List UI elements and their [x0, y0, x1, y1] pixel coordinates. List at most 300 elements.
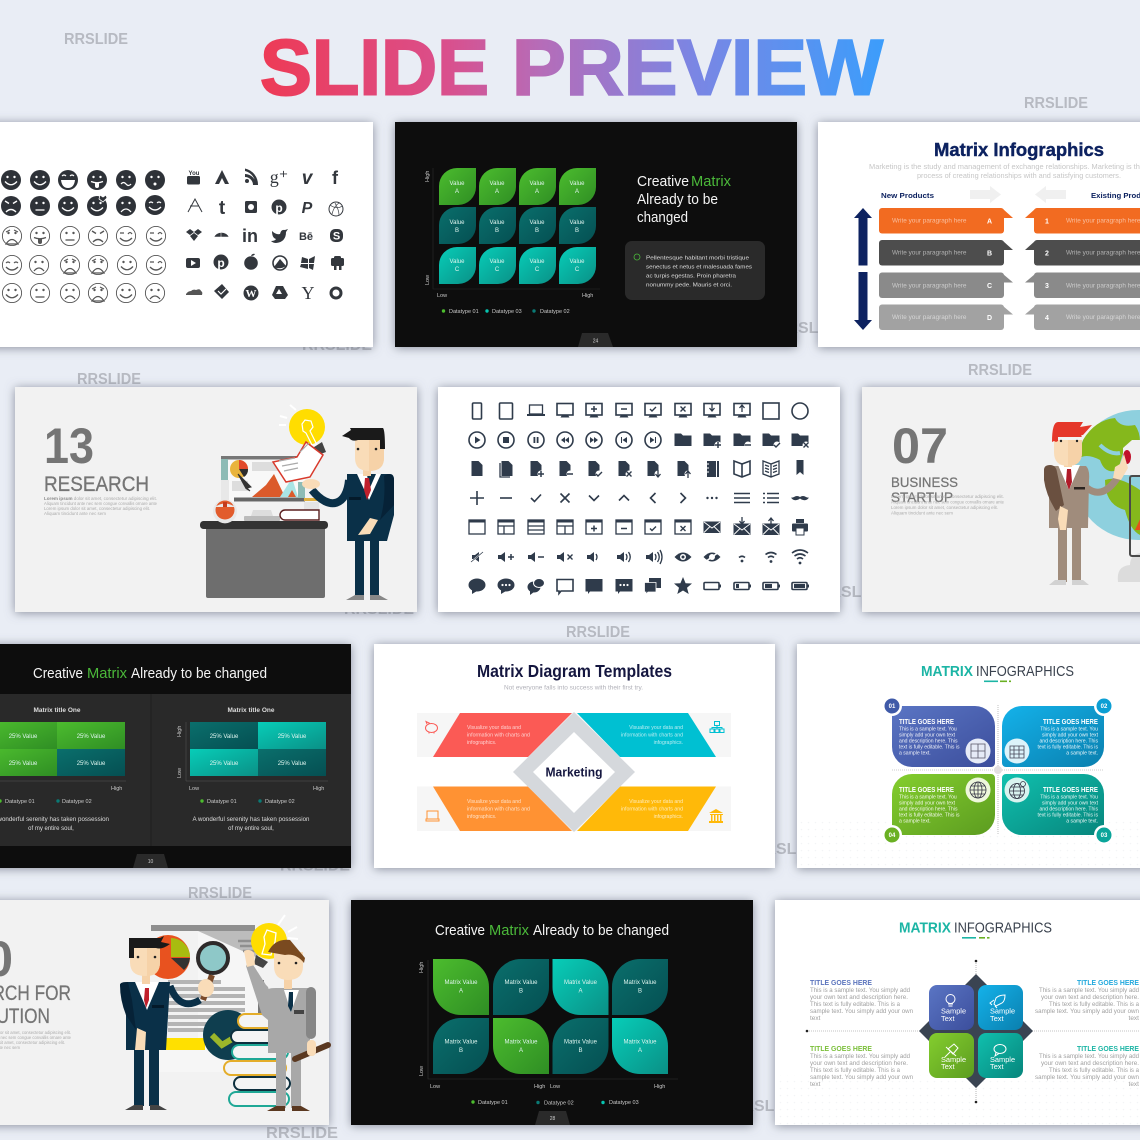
chart: right matrix: Low: [177, 768, 183, 778]
heading: Already to be: [637, 191, 718, 208]
icon: piggy bank: [426, 722, 438, 734]
chart: leaf matrix: Low: [437, 293, 447, 299]
panel: emoji and social icons slide: [0, 122, 373, 347]
column labels: [881, 191, 1140, 200]
heading: INFOGRAPHICS: [976, 663, 1074, 680]
chart: leaf matrix: A: [459, 988, 463, 994]
tile: chat bubble: Text: [990, 1062, 1004, 1071]
chart: left matrix: 25% Value: [9, 761, 38, 767]
heading: Creative: [435, 923, 485, 939]
icon grid: social logos: S: [333, 230, 340, 242]
chart: leaf matrix: Value: [490, 220, 505, 226]
heading: STARTUP: [891, 489, 953, 505]
chart: leaf matrix: Low: [550, 1084, 560, 1090]
chart: leaf matrix: Value: [450, 220, 465, 226]
chart: leaf matrix: Value: [570, 220, 585, 226]
diagram: four segments around diamond: information with charts and: [621, 732, 683, 738]
text block: [0, 1030, 72, 1050]
arrows: light pointers: [970, 186, 1066, 203]
bars: left column: D: [987, 315, 992, 322]
callout box: ac turpis egestas. Proin pharetra: [646, 274, 737, 280]
chart: leaf matrix: High: [419, 962, 425, 973]
chart: leaf matrix: Value: [530, 220, 545, 226]
diagram: four segments around diamond: infographics.: [467, 740, 496, 746]
chart: leaf matrix: B: [575, 228, 579, 234]
chart: leaf matrix: Value: [490, 259, 505, 265]
watermarks: RRSLIDE: [1024, 95, 1088, 112]
panel: matrix infographics arrows slide: [818, 122, 1140, 347]
illustration: stacked books: [224, 1014, 290, 1106]
panel: business startup slide: [862, 387, 1140, 612]
chart: left matrix: Datatype 02: [62, 799, 92, 805]
number badges: 02: [1101, 704, 1108, 710]
watermarks: RRSLIDE: [818, 584, 888, 601]
chart: leaf matrix: Matrix Value: [564, 980, 598, 986]
legend: [442, 309, 570, 315]
main title: [260, 22, 883, 112]
page number tab: [578, 333, 613, 347]
icon: bank: [709, 809, 723, 823]
panel: research slide: [15, 387, 417, 612]
chart: left matrix: High: [111, 786, 122, 792]
illustration: door with button: [1123, 440, 1140, 556]
chart: leaf matrix: Value: [450, 259, 465, 265]
chart: leaf matrix: Low: [430, 1084, 440, 1090]
text block: Lorem ipsum dolor sit amet, consectetur adipiscing elit.: [44, 496, 157, 501]
bars: right column: Write your paragraph here: [1066, 282, 1140, 290]
text block: bottom left: [810, 1046, 913, 1088]
bars: left column: A: [987, 218, 992, 226]
section number: 07: [892, 418, 948, 474]
bars: left column: Write your paragraph here: [892, 250, 967, 256]
legend: Datatype 03: [609, 1100, 639, 1106]
card 02: This is a sample text. You: [1040, 726, 1098, 732]
chart: left matrix: Matrix title One: [34, 707, 81, 714]
bars: left column: [879, 208, 1013, 330]
card 02: and description here. This: [1039, 738, 1098, 744]
chart: leaf matrix: Low: [419, 1066, 425, 1076]
text block: top right: text: [1129, 1015, 1139, 1022]
chart: leaf matrix: C: [535, 267, 540, 273]
icon row: media and folders: [469, 432, 810, 448]
chart: right matrix: 25% Value: [210, 734, 239, 740]
heading: Creative: [33, 666, 83, 682]
bars: right column: 3: [1045, 283, 1049, 290]
diagram: four segments around diamond: information with charts and: [467, 732, 530, 738]
icon grid: social logos: t: [219, 198, 226, 219]
panel: research for solution slide: [0, 900, 329, 1125]
panel: matrix infographics diamond slide: [775, 900, 1140, 1125]
icon grid: social logos: P: [302, 200, 313, 217]
heading: Matrix Infographics: [934, 140, 1104, 160]
watermarks: RRSLIDE: [64, 31, 128, 48]
text block: Aliquam tincidunt ante nec sem congue convallis ornare ante: [891, 500, 1005, 504]
text block: top left: This is a sample text. You simply add: [810, 987, 910, 994]
heading: Matrix: [489, 923, 530, 939]
icon grid: social logos: [186, 167, 344, 303]
connector lines: [892, 705, 1104, 835]
card 04: a sample text.: [899, 818, 931, 824]
chart: leaf matrix: C: [495, 267, 500, 273]
chart: leaf matrix: A: [575, 189, 579, 195]
bars: left column: Write your paragraph here: [892, 218, 967, 224]
heading underline: [984, 680, 1011, 682]
text block: [891, 494, 1005, 516]
panel: dark leaf matrix slide: [395, 122, 797, 347]
callout box: [625, 241, 765, 300]
watermarks: RRSLIDE: [77, 371, 141, 388]
chart: leaf matrix: Value: [530, 259, 545, 265]
tile: chat bubble: Sample: [990, 1055, 1015, 1064]
text block: top left: TITLE GOES HERE: [810, 980, 872, 987]
chart: leaf matrix: B: [519, 988, 523, 994]
chart: right matrix: Matrix title One: [228, 707, 275, 714]
heading: Matrix Diagram Templates: [477, 661, 672, 681]
chart: leaf matrix: Matrix Value: [505, 1040, 538, 1046]
text block: top left: your own text and description here.: [810, 994, 908, 1001]
text block: top right: [1035, 980, 1139, 1022]
illustration: flask: [213, 480, 237, 523]
chart: leaf matrix: Matrix Value: [445, 980, 478, 986]
chart: leaf matrix: [419, 959, 678, 1090]
card 02: TITLE GOES HERE: [1043, 719, 1098, 726]
center node: [994, 766, 1002, 774]
icon row: documents and books: [472, 460, 804, 478]
chart: right matrix: 25% Value: [278, 734, 307, 740]
illustration: cloud: [1118, 553, 1140, 582]
arrow: up: [854, 208, 872, 266]
number badges: [882, 696, 1114, 845]
watermarks: RRSLIDE: [280, 858, 350, 874]
icon grid: social logos: v: [302, 168, 314, 189]
watermarks: RRSLIDE: [968, 362, 1032, 379]
chart: leaf matrix: Value: [450, 181, 465, 187]
illustration: desk: [200, 521, 328, 598]
chart: leaf matrix: Value: [570, 181, 585, 187]
text block: top right: TITLE GOES HERE: [1077, 980, 1139, 987]
illustration: light bulb: [279, 405, 326, 455]
diagram: four segments around diamond: Visualize your data and: [629, 799, 683, 805]
heading: BUSINESS: [891, 474, 958, 490]
diagram: four segments around diamond: [417, 712, 731, 832]
heading: Already to be changed: [131, 666, 267, 682]
illustration: man with scroll: [244, 940, 328, 1111]
illustration: globe: [1073, 410, 1140, 540]
bars: right column: Write your paragraph here: [1066, 314, 1140, 321]
text block: Lorem ipsum dolor sit amet, consectetur adipiscing elit.: [891, 505, 998, 510]
chart: leaf matrix: High: [654, 1084, 665, 1090]
legend: Datatype 01: [449, 309, 479, 315]
connector lines: [807, 961, 1140, 1102]
text block: Lorem ipsum dolor sit amet, consectetur adipiscing elit.: [891, 494, 1004, 499]
illustration: document backdrop: [151, 925, 264, 1072]
diagram: four segments around diamond: information with charts and: [621, 806, 683, 812]
illustration: businessman: [302, 428, 394, 600]
diagram: four segments around diamond: infographics.: [654, 814, 683, 820]
illustration: red-haired businessman: [1044, 422, 1128, 585]
callout box: nonummy pede. Mauris et orci.: [646, 282, 732, 288]
diagram: four segments around diamond: information with charts and: [467, 806, 530, 812]
card 03: [1002, 774, 1104, 835]
chart: right matrix: Datatype 01: [207, 799, 237, 805]
icon row: devices: [472, 403, 808, 419]
bars: left column: B: [987, 250, 992, 258]
card 04: TITLE GOES HERE: [899, 787, 954, 794]
watermarks: RRSLIDE: [566, 624, 630, 641]
bars: right column: 2: [1045, 250, 1049, 258]
card 03: This is a sample text. You: [1040, 794, 1098, 800]
watermarks: RRSLIDE: [753, 841, 823, 858]
diagram: four segments around diamond: infographics.: [467, 814, 496, 820]
text block: Aliquam tincidunt ante nec sem congue convallis ornare ante: [44, 501, 158, 506]
diagram: four segments around diamond: infographics.: [654, 740, 683, 746]
card 03: text is fully editable. This is: [1038, 812, 1098, 818]
heading underline: [962, 937, 990, 939]
illustration: man with magnifier: [120, 936, 228, 1110]
heading: [33, 666, 267, 682]
tile: lightbulb: Sample: [941, 1006, 966, 1016]
chart: leaf matrix: B: [578, 1048, 583, 1054]
illustration: businessman at desk with ideas: [200, 405, 394, 600]
icon grid: social logos: g⁺: [270, 167, 288, 187]
icon grid: social logos: W: [246, 288, 256, 300]
chart: leaf matrix: High: [582, 293, 593, 299]
heading: [435, 923, 669, 939]
number badges: 03: [1101, 833, 1108, 839]
chart: leaf matrix: B: [455, 228, 459, 234]
chart: left matrix: 25% Value: [77, 761, 106, 767]
card 04: This is a sample text. You: [899, 794, 957, 800]
bars: left column: C: [987, 283, 992, 290]
legend: [471, 1100, 639, 1106]
chart: leaf matrix: Value: [490, 181, 505, 187]
number badges: 04: [889, 833, 896, 839]
bars: right column: Write your paragraph here: [1066, 250, 1140, 256]
heading: INFOGRAPHICS: [954, 920, 1052, 936]
heading: Creative: [637, 173, 689, 190]
diagram: four segments around diamond: Visualize your data and: [629, 725, 683, 731]
text block: bottom right: TITLE GOES HERE: [1077, 1046, 1139, 1053]
chart: leaf matrix: C: [455, 267, 460, 273]
icon row: audio, view and wifi: [471, 550, 808, 564]
chart: leaf matrix: A: [578, 988, 583, 994]
chart: right matrix: High: [313, 786, 324, 792]
card 01: This is a sample text. You: [899, 726, 957, 732]
heading: [891, 474, 958, 505]
bars: right column: 4: [1045, 315, 1049, 322]
chart: right matrix: [177, 707, 328, 832]
card 01: [892, 706, 995, 767]
chart: left matrix: Datatype 01: [5, 799, 35, 805]
legend: Datatype 01: [478, 1100, 508, 1106]
card 01: and description here. This: [899, 738, 958, 744]
text block: bottom left: sample text. You simply add your own: [810, 1074, 913, 1081]
tile: lightbulb: [929, 985, 974, 1030]
page number tab: 28: [550, 1116, 555, 1122]
chart: leaf matrix: Matrix Value: [445, 1040, 478, 1046]
chart: leaf matrix: B: [535, 228, 539, 234]
text block: bottom left: This is a sample text. You simply add: [810, 1053, 910, 1060]
chart: leaf matrix: Matrix Value: [564, 1040, 598, 1046]
illustration: pie chart: [146, 935, 190, 979]
tile: pin: [929, 1033, 974, 1078]
chart: leaf matrix: High: [534, 1084, 545, 1090]
chart: left matrix: 25% Value: [77, 734, 106, 740]
chart: leaf matrix: Matrix Value: [624, 980, 657, 986]
text block: top left: [810, 980, 913, 1022]
bars: left column: Write your paragraph here: [892, 314, 967, 321]
tile: lightbulb: Text: [941, 1014, 955, 1023]
legend: Datatype 02: [540, 309, 570, 315]
chart: right matrix: Datatype 02: [265, 799, 295, 805]
card 03: a sample text.: [1066, 818, 1098, 824]
illustration: stacked books: [280, 498, 319, 520]
chart: left matrix: [0, 707, 126, 832]
tile: pin: Text: [941, 1062, 955, 1071]
icon grid: social logos: p: [275, 201, 283, 215]
tile: chat bubble: [978, 1033, 1023, 1078]
main title: SLIDE: [260, 22, 489, 112]
chart: leaf matrix: Value: [530, 181, 545, 187]
watermarks: RRSLIDE: [731, 1098, 801, 1115]
card 04: text is fully editable. This is: [899, 812, 960, 818]
text block: bottom right: [1035, 1046, 1139, 1088]
icon grid: social logos: Bē: [299, 231, 313, 243]
legend: Datatype 03: [492, 309, 522, 315]
watermarks: RRSLIDE: [188, 885, 252, 902]
subtitle: Not everyone falls into success with their first try.: [504, 686, 643, 692]
chart: leaf matrix: Matrix Value: [624, 1040, 657, 1046]
icon grid: social logos: p: [217, 256, 225, 270]
card 04: and description here. This: [899, 806, 958, 812]
icon: laptop: [426, 811, 439, 821]
bars: left column: Write your paragraph here: [892, 282, 967, 290]
chart: leaf matrix: B: [459, 1048, 463, 1054]
text block: top left: text: [810, 1015, 821, 1022]
callout box: Pellentesque habitant morbi tristique: [646, 256, 749, 262]
heading: Already to be changed: [533, 923, 669, 939]
bars: right column: [1025, 208, 1140, 330]
subtitle: Marketing is the study and management of exchange relationships. Marketing is the: [869, 162, 1140, 171]
card 02: a sample text.: [1066, 750, 1098, 756]
chart: leaf matrix: B: [495, 228, 499, 234]
chart: leaf matrix: Low: [425, 275, 431, 285]
card 03: simply add your own text: [1042, 800, 1099, 806]
text block: bottom left: This text is fully editable. This is a: [810, 1067, 900, 1074]
chart: right matrix: 25% Value: [278, 761, 307, 767]
heading: RESEARCH: [44, 473, 149, 496]
card 02: text is fully editable. This is: [1038, 744, 1098, 750]
diagram: four segments around diamond: Visualize your data and: [467, 799, 521, 805]
chart: right matrix: 25% Value: [210, 761, 239, 767]
column labels: New Products: [881, 191, 934, 200]
chart: leaf matrix: [425, 168, 600, 299]
illustration: computer monitor: [221, 456, 305, 521]
illustration: check badge: [203, 1010, 253, 1060]
text block: bottom left: text: [810, 1081, 821, 1088]
icon grid: filled smileys: [1, 170, 165, 216]
number badges: 01: [889, 704, 896, 710]
chart: leaf matrix: A: [455, 189, 459, 195]
dark diamond: [919, 974, 1033, 1088]
chart: right matrix: Low: [189, 786, 199, 792]
illustration: light bulb: [251, 915, 298, 968]
text block: top left: This text is fully editable. This is a: [810, 1001, 900, 1008]
panel: matrix diagram templates slide: [374, 644, 775, 868]
heading: MATRIX: [899, 920, 951, 936]
chart: leaf matrix: High: [425, 171, 431, 182]
text block: Aliquam tincidunt ante nec sem: [891, 510, 954, 516]
chart: left matrix: of my entire soul,: [28, 826, 74, 832]
page number tab: 10: [148, 859, 153, 865]
tile: rocket: [978, 985, 1023, 1030]
heading: [921, 663, 1074, 680]
chart: right matrix: A wonderful serenity has taken possession: [192, 817, 310, 823]
text block: Lorem ipsum dolor sit amet, consectetur adipiscing elit.: [44, 506, 150, 511]
card 01: a sample text.: [899, 750, 931, 756]
heading: changed: [637, 209, 688, 226]
heading: Matrix: [87, 666, 128, 682]
subtitle: [869, 162, 1140, 180]
text block: Aliquam tincidunt ante nec sem: [44, 511, 107, 516]
tile: rocket: Text: [990, 1014, 1004, 1023]
chart: left matrix: 25% Value: [9, 734, 38, 740]
watermarks: RRSLIDE: [302, 337, 372, 354]
panel: icon set slide: [438, 387, 840, 612]
chart: leaf matrix: A: [535, 189, 539, 195]
card 02: [1002, 706, 1104, 767]
icon row: interface marks: [470, 491, 809, 505]
illustration: research scene: [120, 915, 328, 1111]
watermarks: RRSLIDE: [344, 601, 414, 618]
chart: leaf matrix: C: [575, 267, 580, 273]
icon row: chat, star and battery: [468, 577, 809, 595]
card 04: [892, 774, 995, 835]
heading: [0, 982, 71, 1028]
diagram: four segments around diamond: Marketing: [546, 764, 603, 780]
text block: top left: sample text. You simply add your own: [810, 1008, 913, 1015]
chart: leaf matrix: A: [519, 1048, 523, 1054]
bars: right column: 1: [1045, 218, 1049, 226]
card 03: TITLE GOES HERE: [1043, 787, 1098, 794]
text block: top right: your own text and description here.: [1041, 994, 1139, 1001]
text block: bottom right: your own text and description here.: [1041, 1060, 1139, 1067]
icon: org chart: [710, 722, 724, 732]
legend: Datatype 02: [544, 1100, 574, 1106]
chart: right matrix: of my entire soul,: [228, 826, 274, 832]
chart: leaf matrix: Value: [570, 259, 585, 265]
chart: leaf matrix: Matrix Value: [505, 980, 538, 986]
card 01: text is fully editable. This is: [899, 744, 960, 750]
heading: [637, 173, 731, 226]
icon grid: social logos: in: [242, 226, 258, 246]
chart: leaf matrix: B: [638, 988, 642, 994]
text block: bottom left: TITLE GOES HERE: [810, 1046, 872, 1053]
chart: leaf matrix: A: [495, 189, 499, 195]
heading: [899, 920, 1052, 936]
card 02: simply add your own text: [1042, 732, 1099, 738]
diagram: four segments around diamond: Visualize your data and: [467, 725, 521, 731]
heading: MATRIX: [921, 663, 973, 680]
heading: Matrix: [691, 173, 731, 190]
panel: matrix infographics cards slide: [797, 644, 1140, 868]
subtitle: process of creating relationships with and satisfying customers.: [917, 171, 1121, 180]
card 04: simply add your own text: [899, 800, 956, 806]
illustration: open book: [273, 442, 323, 482]
main title: PREVIEW: [512, 22, 883, 112]
card 01: simply add your own text: [899, 732, 956, 738]
panel: dark two-matrix slide: [0, 644, 351, 868]
